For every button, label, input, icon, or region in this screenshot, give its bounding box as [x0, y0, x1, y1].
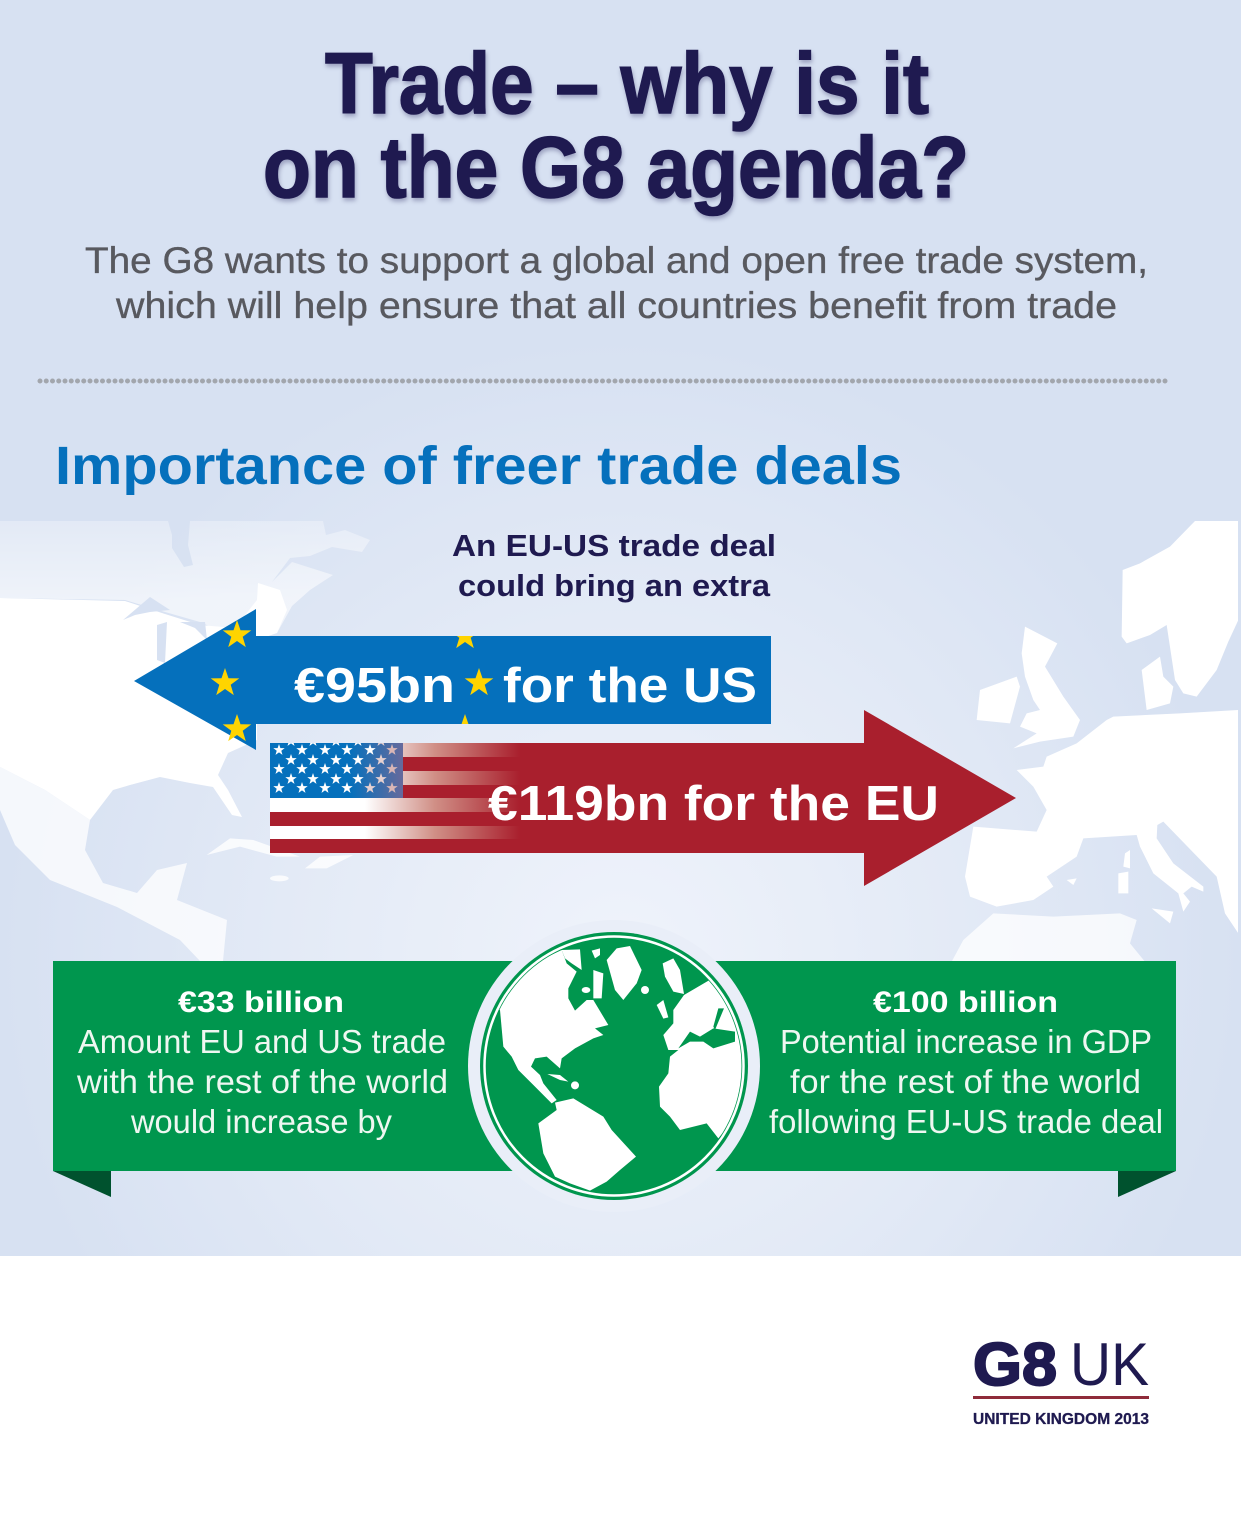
Scandinavia: [663, 958, 684, 994]
North America: [493, 950, 608, 1103]
title: on the G8 agenda?: [263, 120, 969, 216]
right banner text: [769, 986, 1163, 1140]
flag canton: [270, 743, 403, 798]
map: Great Lakes: [123, 597, 207, 663]
map: mainland Europe: [965, 710, 1238, 933]
world map background: [0, 521, 1238, 978]
left banner text: [76, 986, 448, 1140]
icon: globe: [468, 920, 760, 1212]
left banner text: would increase by: [130, 1103, 392, 1140]
blue arrow: 95bn for the US: [134, 609, 771, 750]
map: Mediterranean islands: [1067, 850, 1173, 923]
title: [263, 36, 969, 216]
banner fold right: [1118, 1171, 1176, 1197]
map: Mexico and Central America: [0, 767, 227, 961]
Mediterranean and Black Sea: [678, 1008, 735, 1048]
title: Trade – why is it: [325, 36, 929, 132]
map: small coast: [1210, 970, 1238, 978]
heading: importance of freer trade deals: Importance of freer trade deals: [55, 436, 902, 496]
intro text: The G8 wants to support a global and open free trade system,: [85, 240, 1148, 281]
map: Canada: [0, 521, 370, 640]
intro text: [85, 240, 1148, 326]
arrow label: €119bn for the EU: [488, 777, 939, 831]
Britain: [657, 1000, 668, 1019]
Greenland: [607, 946, 642, 1000]
red arrow: 119bn for the EU: [270, 710, 1016, 886]
Europe and Africa: [659, 980, 742, 1138]
left banner text: with the rest of the world: [76, 1063, 448, 1100]
left banner text: Amount EU and US trade: [78, 1023, 446, 1060]
right banner text: Potential increase in GDP: [780, 1023, 1152, 1060]
logo: G8 UK: UK: [1070, 1331, 1149, 1398]
globe continents: [493, 946, 760, 1191]
flag stripes: [270, 743, 530, 839]
blue arrow: EU-US text: An EU-US trade deal: [452, 528, 776, 563]
blue arrow: EU-US text: [452, 528, 776, 603]
right banner text: following EU-US trade deal: [769, 1103, 1163, 1140]
map: Ireland: [977, 677, 1020, 723]
right banner text: €100 billion: [873, 986, 1058, 1019]
map: United States: [0, 583, 287, 820]
banner fold left: [53, 1171, 111, 1197]
right banner text: for the rest of the world: [790, 1063, 1141, 1100]
logo: G8 UK: [973, 1331, 1149, 1428]
arrow label: [294, 659, 757, 713]
map: Europe: [952, 521, 1238, 978]
green banner: [53, 961, 1176, 1197]
logo: G8 UK: G8: [973, 1331, 1057, 1398]
map: Great Britain: [1013, 627, 1080, 748]
arrow label: for the US: [503, 659, 757, 713]
map: Africa: [952, 913, 1145, 962]
map: Caribbean islands: [207, 838, 353, 881]
Caribbean: [547, 1074, 568, 1082]
Iceland: [641, 986, 649, 994]
EU stars: [211, 620, 493, 741]
blue arrow: EU-US text: could bring an extra: [458, 568, 771, 603]
map: Denmark: [1142, 657, 1173, 710]
Arctic islands: [562, 948, 603, 998]
intro text: which will help ensure that all countries benefit from trade: [115, 285, 1117, 326]
South America: [538, 1098, 636, 1191]
arrow label: €95bn: [294, 659, 455, 713]
left banner text: €33 billion: [178, 986, 344, 1019]
logo: G8 UK: UNITED KINGDOM 2013: [973, 1411, 1149, 1428]
map: Scandinavia: [1122, 521, 1238, 697]
